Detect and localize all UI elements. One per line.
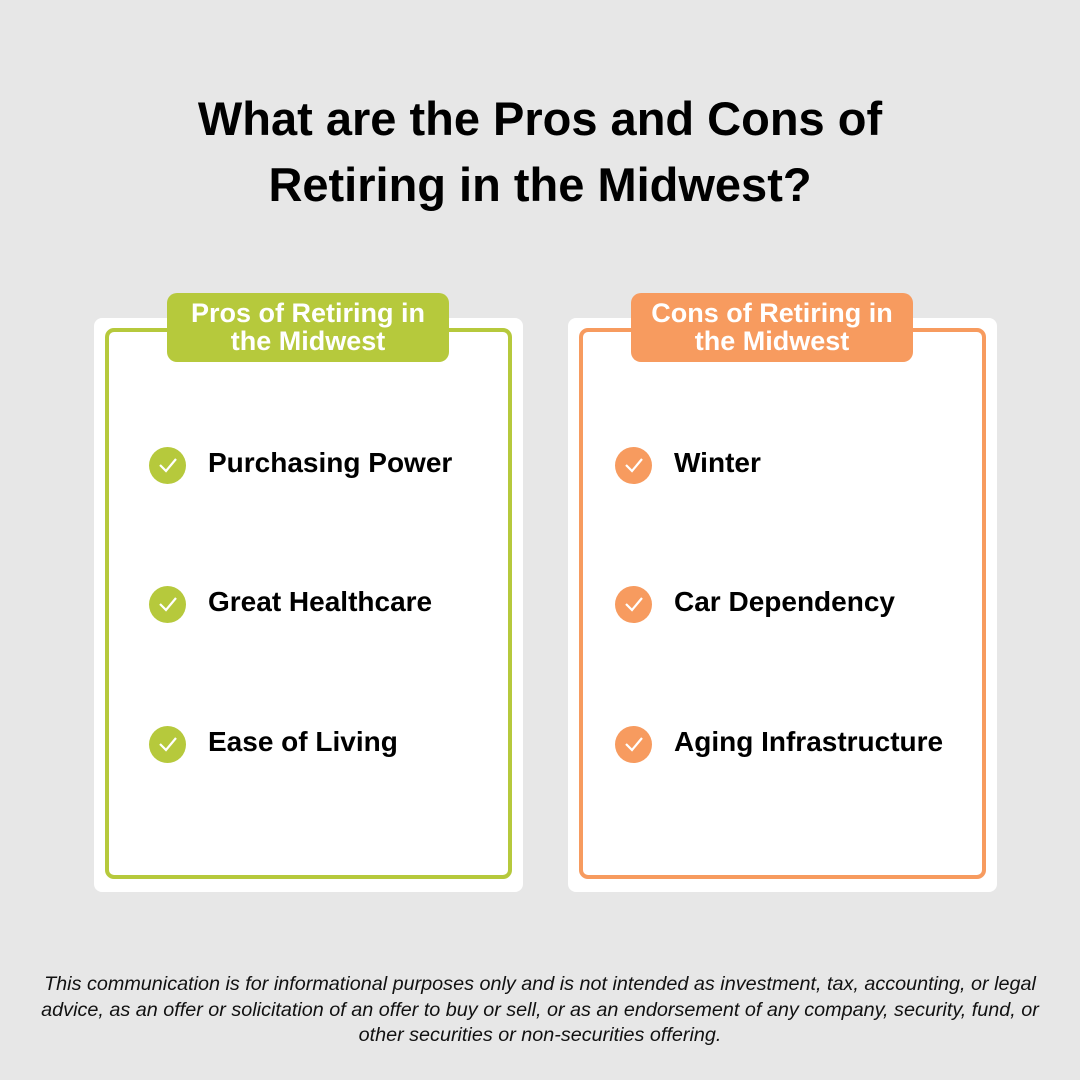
panel: cons xyxy=(568,318,997,892)
con item: car dependency: Car Dependency xyxy=(674,586,895,617)
title xyxy=(198,92,882,211)
title: Retiring in the Midwest? xyxy=(268,158,812,211)
con item: winter: Winter xyxy=(674,447,761,478)
pro item: healthcare xyxy=(149,586,432,623)
con item: car dependency xyxy=(615,586,895,623)
con item: aging infrastructure xyxy=(615,726,943,763)
pro item: healthcare: Great Healthcare xyxy=(208,586,432,617)
cons heading: the Midwest xyxy=(695,326,849,356)
disclaimer xyxy=(41,973,1040,1046)
disclaimer: other securities or non-securities offering. xyxy=(359,1024,721,1046)
pro item: ease of living xyxy=(149,726,398,763)
panel: pros xyxy=(94,318,523,892)
cons heading xyxy=(631,293,913,362)
disclaimer: This communication is for informational purposes only and is not intended as investment, tax, accounting, or legal xyxy=(44,973,1036,995)
pro item: ease of living: Ease of Living xyxy=(208,726,398,757)
cons heading: Cons of Retiring in xyxy=(651,298,893,328)
pro item: purchasing power xyxy=(149,447,452,484)
title: What are the Pros and Cons of xyxy=(198,92,882,145)
pros heading: Pros of Retiring in xyxy=(191,298,425,328)
con item: aging infrastructure: Aging Infrastructure xyxy=(674,726,943,757)
disclaimer: advice, as an offer or solicitation of an offer to buy or sell, or as an endorsement of any company, security, fund, or xyxy=(41,998,1039,1020)
pros heading: the Midwest xyxy=(231,326,385,356)
con item: winter xyxy=(615,447,761,484)
pro item: purchasing power: Purchasing Power xyxy=(208,447,452,478)
pros heading xyxy=(167,293,449,362)
